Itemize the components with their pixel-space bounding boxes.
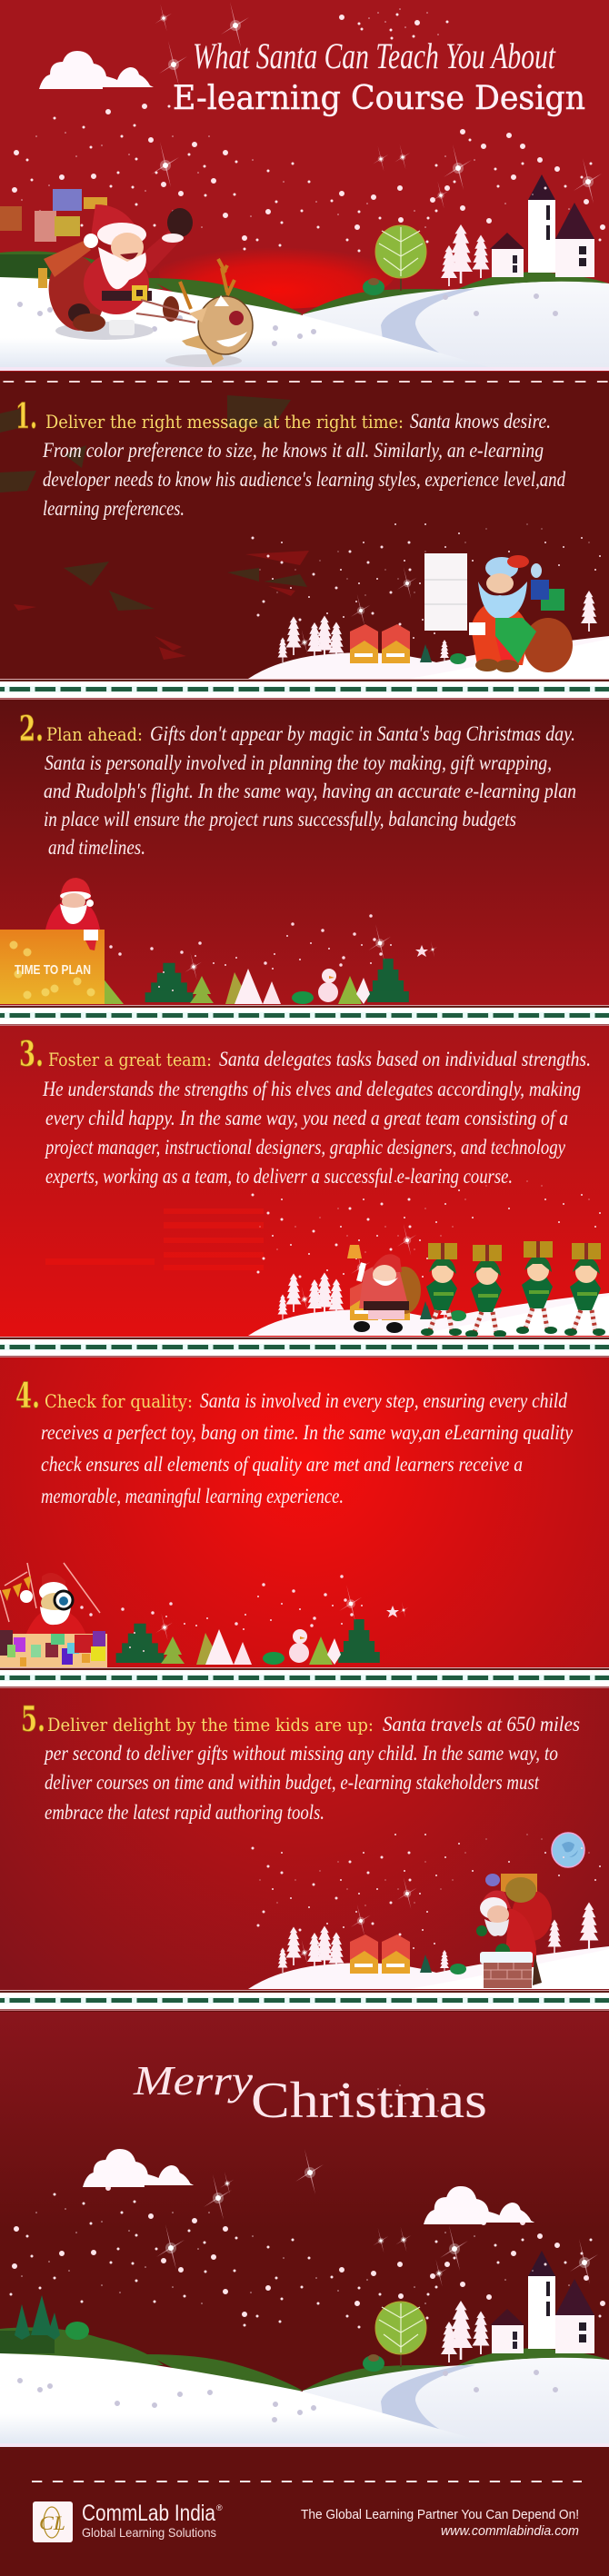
tip 1 text: [15, 395, 565, 520]
tip 5 text: [21, 1698, 580, 1824]
panel: tip 2: [0, 701, 609, 1006]
brand: ®: [216, 2503, 223, 2512]
sparkle stars: [151, 2, 602, 208]
divider 5: [0, 1990, 609, 2011]
tip 1 text: learning preferences.: [43, 497, 185, 520]
panel: tip 4: [0, 1358, 609, 1668]
tip 1 text: Santa knows desire.: [410, 410, 551, 433]
tip 5 text: embrace the latest rapid authoring tools.: [45, 1801, 324, 1824]
sparkle: [253, 524, 600, 654]
landscape: [0, 2251, 609, 2447]
tip 3 text: [19, 1033, 591, 1188]
artifact streaks: [0, 395, 309, 660]
gift table: [0, 1630, 107, 1668]
tip 3 text: experts, working as a team, to deliverr a successful e-learing course.: [45, 1165, 513, 1188]
tip 5 text: Deliver delight by the time kids are up:: [47, 1714, 374, 1736]
divider 4: [0, 1667, 609, 1688]
stitched line: [4, 381, 609, 383]
tip 1 text: Deliver the right message at the right time:: [45, 411, 404, 433]
panel: tip 1: [0, 372, 609, 680]
snow: [11, 2085, 603, 2327]
sign: time to plan: [0, 930, 105, 1004]
tip 3 text: Foster a great team:: [48, 1049, 212, 1070]
merry christmas heading: Merry: [133, 2057, 254, 2104]
illustration: santa with magnifier: [0, 1563, 100, 1636]
number 5: 5.: [21, 1698, 45, 1739]
village hill: [248, 616, 609, 679]
number 2: 2.: [19, 708, 44, 749]
brand: Global Learning Solutions: [82, 2525, 216, 2540]
small trees: [15, 2295, 89, 2340]
logo: [33, 2501, 73, 2542]
sign: time to plan: TIME TO PLAN: [15, 962, 91, 978]
illustration: santa with gifts: [469, 555, 597, 672]
merry christmas heading: [133, 2057, 487, 2129]
title: [173, 35, 585, 117]
tip 5 text: Santa travels at 650 miles: [383, 1713, 580, 1736]
sparkle: [253, 1835, 600, 1964]
divider 1: [0, 679, 609, 700]
divider 2: [0, 1005, 609, 1026]
tree row: [53, 1576, 408, 1665]
artifact streaks: [45, 1208, 264, 1270]
tree row: [82, 916, 437, 1004]
footer: [32, 2482, 582, 2542]
village hill: [248, 1926, 609, 1989]
red sunset glow: [159, 236, 395, 309]
tagline: www.commlabindia.com: [441, 2524, 579, 2539]
brand: [82, 2501, 223, 2540]
tip 2 text: and timelines.: [48, 836, 145, 859]
moon: [552, 1833, 584, 1867]
tagline: [301, 2508, 579, 2539]
panel: hero: [0, 0, 609, 372]
illustration: santa on chimney: [476, 1874, 598, 1988]
sky snow: [11, 9, 603, 251]
snow landscape: [0, 174, 609, 371]
merry christmas heading: Christmas: [251, 2073, 487, 2129]
illustration: santa with bell: [347, 1245, 421, 1333]
illustration: elves: [421, 1241, 605, 1338]
sparkle: [253, 1181, 600, 1311]
number 1: 1.: [15, 395, 37, 436]
panel: tip 5: [0, 1688, 609, 1991]
cloud: [39, 51, 154, 89]
brand: CommLab India: [82, 2501, 215, 2526]
panel: tip 3: [0, 1026, 609, 1338]
illustration: santa behind sign: [45, 878, 100, 930]
logo: CL: [39, 2511, 65, 2534]
tip 2 text: [19, 708, 576, 859]
tagline: The Global Learning Partner You Can Depend On!: [301, 2508, 579, 2522]
stars: [156, 2149, 598, 2286]
tip 2 text: Plan ahead:: [46, 723, 143, 745]
clouds: [83, 2149, 534, 2224]
tip 4 text: [15, 1375, 574, 1507]
village hill: [248, 1272, 609, 1336]
title: E-learning Course Design: [173, 80, 585, 117]
tip 4 text: check ensures all elements of quality are met and learners receive a: [41, 1453, 523, 1476]
number 4: 4.: [15, 1375, 40, 1416]
panel: closing scene: [0, 2012, 609, 2576]
signboard: [424, 553, 467, 631]
number 3: 3.: [19, 1033, 44, 1074]
tip 4 text: Check for quality:: [45, 1390, 193, 1412]
illustration: reindeer: [136, 259, 253, 367]
tip 4 text: memorable, meaningful learning experience.: [41, 1485, 344, 1507]
illustration: santa with sack: [0, 189, 193, 340]
divider 3: [0, 1337, 609, 1358]
tip 2 text: in place will ensure the project runs successfully, balancing budgets: [44, 808, 516, 830]
